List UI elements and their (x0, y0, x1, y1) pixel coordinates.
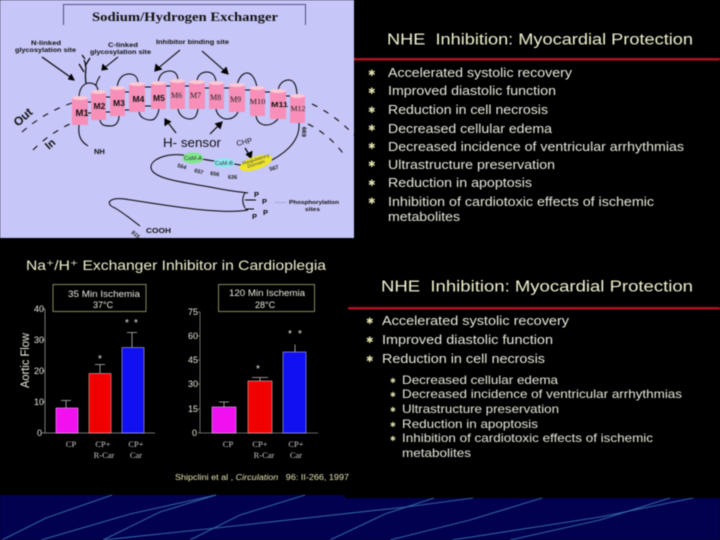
secondary bullets: Inhibition of cardiotoxic effects of ischemic (402, 431, 653, 445)
primary bullets: ✱ (366, 336, 374, 346)
heading: NHE Inhibition: Myocardial Protection (387, 32, 693, 48)
residue numbers: 564 (176, 163, 188, 172)
primary bullets: Accelerated systolic recovery (382, 313, 570, 328)
bar chart: 35 min ischemia: CP+ (95, 439, 111, 449)
segment M11 (270, 89, 288, 119)
secondary bullets: Decreased cellular edema (402, 373, 558, 387)
segment M10 (250, 86, 266, 116)
bullet list: ✱ (368, 87, 376, 97)
annotation labels (15, 39, 229, 56)
segment M7: M7 (190, 91, 201, 100)
bar chart: 120 min ischemia: * (298, 329, 302, 340)
secondary bullets: Ultrastructure preservation (402, 402, 559, 416)
bullet list: Ultrastructure preservation (388, 157, 555, 172)
bullet list (368, 65, 685, 224)
bullet list: ✱ (368, 69, 376, 79)
domain: CaM-B: CaM-B (215, 161, 234, 167)
panel: bottom right slide (348, 278, 720, 460)
secondary bullets: ✱ (390, 391, 396, 399)
segment M4 (129, 82, 145, 112)
bar chart: 35 min ischemia: CP+ (128, 439, 144, 449)
residue numbers: 636 (228, 175, 237, 181)
domain: regulatory (238, 152, 274, 174)
panel: cardioplegia charts (20, 257, 350, 482)
phosphorylation sites: COOH (146, 226, 171, 235)
bar chart: 35 min ischemia: 35 Min Ischemia (68, 289, 140, 299)
domain: regulatory: Regulatory (242, 152, 271, 166)
residue numbers: 815 (130, 230, 141, 240)
bar chart: 120 min ischemia: 30 (188, 379, 198, 389)
segment M3: M3 (113, 98, 125, 108)
bullet list: ✱ (368, 124, 376, 134)
diagram title: Sodium/Hydrogen Exchanger (92, 9, 278, 24)
primary bullets: Reduction in cell necrosis (382, 351, 546, 366)
phosphorylation sites: P (254, 190, 259, 199)
bar chart: 120 min ischemia: R-Car (254, 450, 275, 460)
primary bullets: Improved diastolic function (382, 332, 553, 347)
segment M4: M4 (132, 94, 145, 104)
segment M12 (290, 94, 306, 123)
out and in labels: 699 (302, 126, 308, 137)
bar chart: 35 min ischemia: * (134, 318, 138, 329)
bar chart: 35 min ischemia (20, 284, 155, 460)
segment M8 (209, 81, 224, 109)
domain: CaM-A: CaM-A (184, 156, 203, 162)
secondary bullets (390, 373, 682, 460)
bullet list: Accelerated systolic recovery (388, 65, 573, 80)
phosphorylation sites: sites (305, 207, 320, 213)
out and in labels (11, 105, 308, 156)
segment M2: M2 (94, 101, 106, 111)
panel: top right slide (354, 32, 720, 224)
heading: Na⁺/H⁺ Exchanger Inhibitor in Cardioplegia (26, 257, 326, 273)
out and in labels: H- sensor (163, 136, 221, 150)
glycosylation branch and loops (79, 55, 299, 160)
bar chart: 120 min ischemia: * (288, 329, 292, 340)
out and in labels: In (43, 137, 58, 152)
out and in labels: NH (94, 147, 105, 156)
segment M6 (170, 79, 185, 109)
annotation labels: C-linked (108, 42, 138, 49)
bar chart: 120 min ischemia: * (256, 364, 260, 375)
residue numbers: 657 (193, 168, 204, 176)
bar chart: 120 min ischemia: 60 (188, 331, 198, 341)
bar chart: 120 min ischemia: 0 (192, 428, 197, 438)
segment M7 (189, 80, 205, 109)
bullet list: ✱ (368, 106, 376, 116)
cytoplasmic tail (109, 155, 272, 226)
bullet list: Reduction in apoptosis (388, 175, 533, 190)
bar chart: 120 min ischemia: CP+ (288, 439, 304, 449)
bar chart: 120 min ischemia: CP+ (252, 439, 268, 449)
residue numbers: 656 (210, 171, 220, 178)
segment M3 (110, 86, 125, 116)
bar chart: 120 min ischemia: 28°C (255, 300, 276, 310)
heading: NHE Inhibition: Myocardial Protection (381, 278, 693, 296)
calmodulin and regulatory domains (182, 152, 274, 174)
bullet list: Inhibition of cardiotoxic effects of ischemic (388, 194, 655, 209)
bar chart: 35 min ischemia: CP (66, 439, 76, 449)
secondary bullets: Decreased incidence of ventricular arrhythmias (402, 387, 682, 401)
out and in labels: Out (11, 105, 35, 129)
annotation labels: N-linked (31, 40, 61, 47)
bar chart: 35 min ischemia: R-Car (94, 450, 115, 460)
primary bullets: ✱ (366, 355, 374, 365)
transmembrane segments M1 to M12 (72, 79, 306, 125)
bar chart: 120 min ischemia: Car (290, 450, 302, 460)
bar chart: 35 min ischemia: * (98, 354, 102, 365)
secondary bullets: Reduction in apoptosis (402, 417, 538, 431)
bullet list: ✱ (368, 197, 376, 207)
bar chart: 120 min ischemia: 15 (188, 404, 198, 414)
citation: Shipclini et al , Circulation 96: II-266, 1997 (175, 473, 350, 482)
bar chart: 35 min ischemia: 20 (34, 366, 44, 376)
bar chart: 35 min ischemia: 30 (34, 335, 44, 345)
bar chart: 35 min ischemia: Car (130, 450, 142, 460)
secondary bullets: metabolites (402, 446, 471, 460)
segment M9 (229, 83, 245, 112)
bar chart: 35 min ischemia: Aortic Flow (20, 332, 32, 388)
phosphorylation sites: P (262, 197, 267, 206)
panel: sodium/hydrogen exchanger diagram (0, 0, 354, 240)
bullet list: metabolites (388, 209, 461, 224)
segment M1 (72, 96, 89, 125)
bar chart: 120 min ischemia: 75 (188, 307, 198, 317)
secondary bullets: ✱ (390, 421, 396, 429)
red rule (354, 58, 720, 60)
bullet list: ✱ (368, 142, 376, 152)
segment M11: M11 (271, 100, 288, 109)
segment M6: M6 (171, 91, 182, 100)
residue numbers: 567 (269, 165, 279, 173)
bullet list: ✱ (368, 179, 376, 189)
CHP arrow (245, 148, 252, 158)
bullet list: Improved diastolic function (388, 83, 556, 98)
phosphorylation sites (146, 190, 340, 235)
bar chart: 120 min ischemia (188, 284, 318, 460)
bar chart: 120 min ischemia: 120 Min Ischemia (229, 288, 305, 298)
segment M8: M8 (210, 93, 221, 102)
secondary bullets: ✱ (390, 406, 396, 414)
phosphorylation sites: Phosphorylation (289, 200, 340, 206)
segment M1: M1 (76, 108, 89, 119)
red rule (348, 307, 720, 310)
primary bullets (366, 313, 570, 366)
bar chart: 35 min ischemia: 0 (37, 428, 42, 438)
secondary bullets: ✱ (390, 377, 396, 385)
bar chart: 35 min ischemia: * (125, 318, 129, 329)
segment M5 (151, 81, 166, 109)
bullet list: ✱ (368, 160, 376, 170)
residue numbers (130, 163, 279, 240)
bar chart: 120 min ischemia: CP (223, 439, 233, 449)
phosphorylation sites: P (252, 212, 257, 221)
bar chart: 120 min ischemia: 45 (188, 355, 198, 365)
footer band with streaks (0, 495, 720, 540)
annotation labels: glycosylation site (15, 47, 76, 54)
bullet list: Reduction in cell necrosis (388, 102, 549, 117)
bullet list: Decreased cellular edema (388, 121, 553, 136)
primary bullets: ✱ (366, 317, 374, 327)
annotation arrows (42, 50, 228, 134)
bar chart: 35 min ischemia: 10 (34, 397, 44, 407)
bar chart: 35 min ischemia: 40 (34, 304, 44, 314)
membrane dashed lines (22, 103, 354, 156)
annotation labels: glycosylation site (90, 49, 151, 56)
segment M2 (91, 90, 106, 120)
domain: regulatory: Domain (247, 158, 266, 169)
secondary bullets: ✱ (390, 435, 396, 443)
out and in labels: CHP (236, 136, 253, 148)
segment M9: M9 (230, 95, 241, 104)
segment M10: M10 (250, 97, 266, 106)
bar chart: 35 min ischemia: 37°C (93, 300, 114, 310)
segment M12: M12 (290, 104, 306, 113)
annotation labels: Inhibitor binding site (156, 39, 229, 46)
bullet list: Decreased incidence of ventricular arrhythmias (388, 139, 685, 154)
segment M5: M5 (153, 93, 165, 103)
phosphorylation sites: P (263, 208, 268, 217)
diagram title (64, 4, 306, 25)
